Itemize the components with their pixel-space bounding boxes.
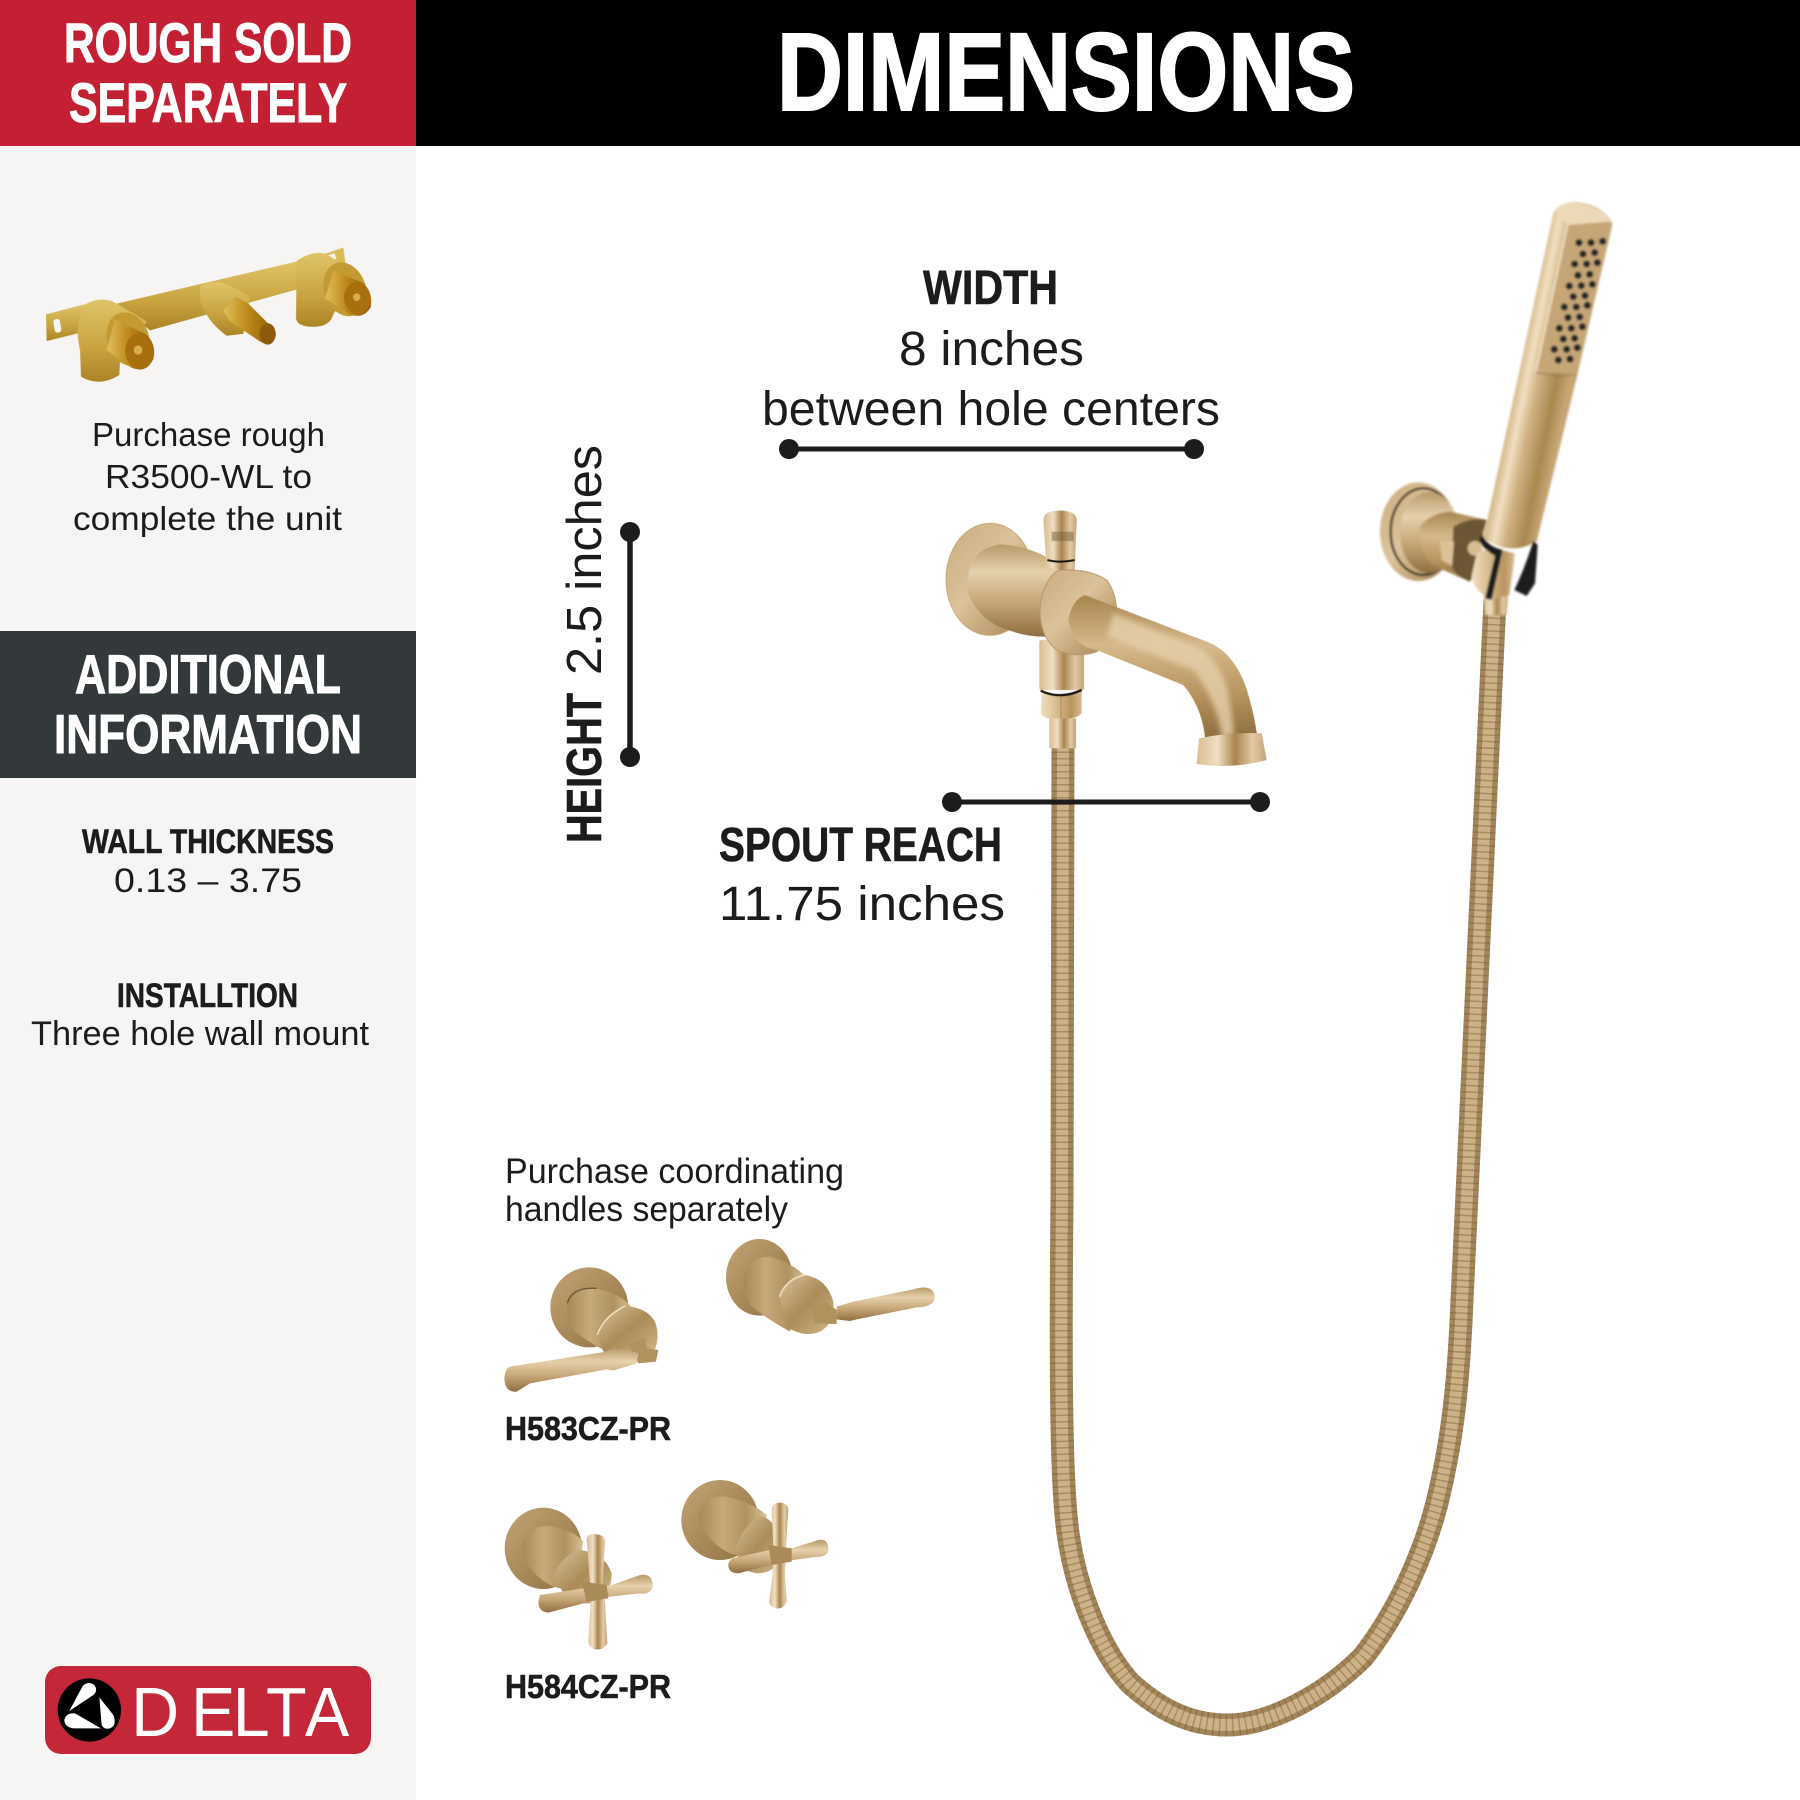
text: spout reach dimension: 11.75 inches [719,878,1005,931]
text: purchase rough: R3500-WL to [105,458,312,495]
panel: rough sold separately banner: ROUGH SOLD [64,11,352,74]
text: spout reach dimension [719,819,1005,931]
panel: rough sold separately banner: SEPARATELY [69,71,347,134]
panel: additional information heading: INFORMATION [54,703,362,765]
text: H583CZ-PR: H583CZ-PR [505,1410,671,1447]
logo: delta [45,1666,371,1754]
text: purchase coordinating handles [505,1152,844,1229]
text: purchase coordinating handles: handles separately [505,1190,788,1229]
arrow: height measure line [620,522,640,767]
image: cross handles [505,1480,828,1650]
panel: left sidebar [0,146,416,1800]
panel: additional information heading [0,631,416,778]
text: wall thickness [82,823,334,900]
arrow: width measure line [779,439,1204,459]
panel: additional information heading: ADDITIONAL [75,643,341,705]
text: spout reach dimension: SPOUT REACH [719,819,1002,872]
text: height dimension [558,445,612,843]
text: width dimension: between hole centers [762,383,1220,436]
spray nozzles [1551,238,1606,364]
text: width dimension [762,262,1220,436]
arrow: spout reach measure line [942,792,1270,812]
text: purchase rough [73,416,342,537]
title: dimensions [416,0,1800,146]
image: flexible hose [1061,600,1495,1725]
text: wall thickness: 0.13 – 3.75 [114,862,302,900]
text: purchase coordinating handles: Purchase coordinating [505,1152,844,1191]
text: installation: Three hole wall mount [31,1015,370,1053]
image: brass rough valve [46,247,375,382]
text: height dimension: 2.5 inches [558,445,612,675]
panel: rough sold separately banner [0,0,416,146]
text: wall thickness: WALL THICKNESS [82,823,334,861]
text: width dimension: 8 inches [899,323,1084,376]
image: tub spout [946,511,1267,766]
text: H584CZ-PR: H584CZ-PR [505,1668,671,1705]
logo: delta: DELTA [131,1673,350,1751]
text: installation [31,977,370,1053]
text: purchase rough: Purchase rough [92,416,325,453]
title: dimensions: DIMENSIONS [777,11,1355,134]
text: height dimension: HEIGHT [558,693,612,843]
image: lever handles [504,1239,935,1392]
image: hand shower wand with wall mount [1380,202,1613,615]
text: width dimension: WIDTH [923,262,1058,315]
text: purchase rough: complete the unit [73,500,342,537]
text: installation: INSTALLTION [117,977,298,1015]
